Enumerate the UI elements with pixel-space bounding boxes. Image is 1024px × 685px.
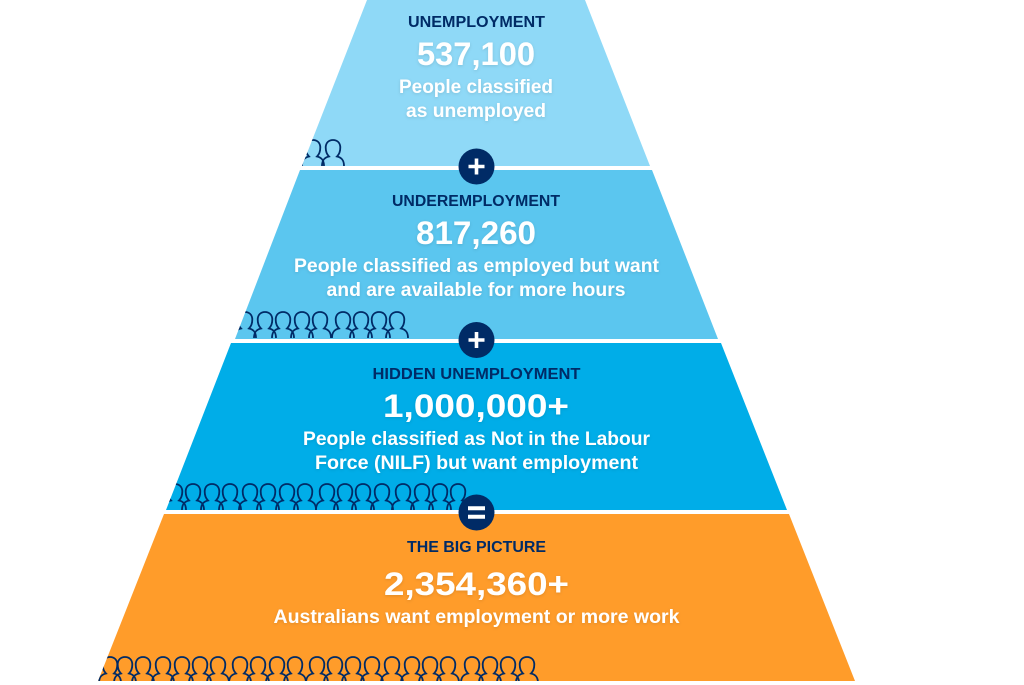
description: unemployment: as unemployed [406,101,546,122]
pyramid infographic [98,0,855,681]
description: hidden unemployment: Force (NILF) but want employment [315,453,639,474]
icon: equals badge [458,494,494,530]
number: 817,260: 817,260 [416,215,536,251]
panel: the big picture [98,514,855,683]
panel: unemployment [302,0,650,166]
icon: people row, unemployment [302,140,344,166]
heading: unemployment: UNEMPLOYMENT [408,14,546,31]
icon: people row, hidden unemployment [164,484,469,510]
heading: underemployment: UNDEREMPLOYMENT [392,193,561,210]
icon: plus badge 1 [458,148,494,184]
description: unemployment: People classified [399,77,553,98]
icon: people row, underemployment [234,312,408,338]
panel: hidden unemployment [164,343,787,510]
number: 1,000,000+: 1,000,000+ [383,388,569,424]
icon: people row, the big picture [99,657,538,683]
number: 2,354,360+: 2,354,360+ [384,566,569,602]
number: 537,100: 537,100 [417,36,535,72]
description: the big picture: Australians want employment or more work [274,607,680,628]
description: underemployment: People classified as employed but want [294,256,660,277]
description: hidden unemployment: People classified as Not in the Labour [303,429,651,450]
heading: hidden unemployment: HIDDEN UNEMPLOYMENT [372,366,581,383]
heading: the big picture: THE BIG PICTURE [407,539,546,556]
description: underemployment: and are available for more hours [326,280,626,301]
icon: plus badge 2 [458,322,494,358]
panel: underemployment [234,170,718,339]
